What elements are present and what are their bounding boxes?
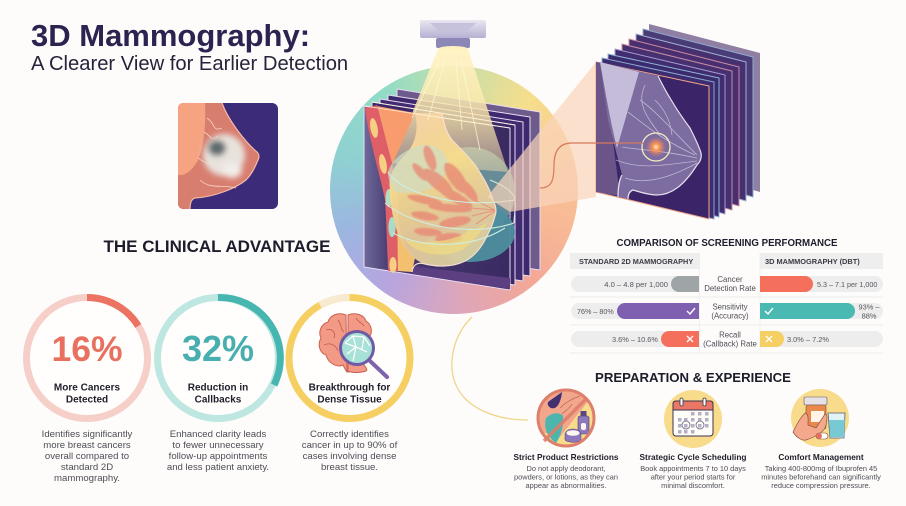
row: cancer detection rate: Cancer xyxy=(717,275,743,284)
row: sensitivity: Sensitivity xyxy=(712,302,748,312)
text: strategic cycle scheduling: minimal discomfort. xyxy=(661,481,725,490)
text: 16% description: mammography. xyxy=(54,473,120,484)
breast body xyxy=(390,113,496,266)
icon: small 2D mammogram with blurred mass xyxy=(178,103,278,209)
stat ring: 32% reduction in callbacks: 32% xyxy=(182,328,254,369)
icon: brain with magnifier xyxy=(319,314,387,377)
slice stack with tumour highlight xyxy=(596,24,760,219)
row: sensitivity: 93% – xyxy=(859,302,880,312)
text: strategic cycle scheduling: after your period starts for xyxy=(651,472,736,482)
text: 32% description: to fewer unnecessary xyxy=(172,440,264,451)
glandular lobes xyxy=(407,144,481,244)
text: strict product restrictions: appear as abnormalities. xyxy=(526,481,606,490)
x-ray fibres xyxy=(616,85,697,181)
fat stripe at base xyxy=(397,205,415,272)
text: dense tissue description: Correctly identifies xyxy=(310,429,389,440)
row: sensitivity: (Accuracy) xyxy=(711,312,749,320)
breast outline xyxy=(412,113,496,272)
pale dome xyxy=(388,145,448,193)
comparison table xyxy=(570,253,883,353)
text: comfort management xyxy=(761,452,881,490)
text: comfort management: Taking 400-800mg of Ibuprofen 45 xyxy=(765,464,877,473)
row: sensitivity: 88% xyxy=(862,312,877,320)
stat ring: breakthrough for dense tissue xyxy=(289,297,410,418)
text: 16% description: more breast cancers xyxy=(43,440,131,451)
x-ray beam xyxy=(392,49,508,172)
teal discs behind breast xyxy=(425,147,515,262)
text: 32% description: follow-up appointments xyxy=(169,451,268,462)
row: recall rate: 3.6% – 10.6% xyxy=(612,335,658,344)
table headers xyxy=(570,253,883,269)
tumour circle xyxy=(642,133,670,161)
heading: the clinical advantage: THE CLINICAL ADVANTAGE xyxy=(104,237,330,256)
stat ring: breakthrough for dense tissue: Dense Tissue xyxy=(317,394,382,406)
connector curve to preparation xyxy=(452,317,528,420)
row: sensitivity xyxy=(571,302,883,320)
nipple ducts xyxy=(470,200,495,224)
text: strict product restrictions xyxy=(513,452,619,490)
row: sensitivity: 76% – 80% xyxy=(577,307,614,316)
row: cancer detection rate xyxy=(571,275,883,293)
title xyxy=(31,18,348,75)
stat ring: 16% more cancers detected xyxy=(26,298,148,418)
icon: strict product restrictions xyxy=(538,390,594,446)
stat ring: 16% more cancers detected: 16% xyxy=(51,329,123,369)
projection cone to slice stack xyxy=(487,62,596,212)
text: 32% description: and less patient anxiety. xyxy=(167,462,269,473)
rib stripe xyxy=(365,105,398,271)
stat ring: breakthrough for dense tissue: Breakthrough for xyxy=(309,382,390,394)
row: recall rate: Recall xyxy=(719,330,741,340)
table headers: STANDARD 2D MAMMOGRAPHY xyxy=(579,257,693,266)
ribs xyxy=(369,118,397,273)
slice rings around breast xyxy=(385,172,515,244)
title: A Clearer View for Earlier Detection xyxy=(31,53,348,75)
text: strategic cycle scheduling: Book appointments 7 to 10 days xyxy=(640,464,746,473)
front slice left edge xyxy=(596,62,620,196)
tissue slices xyxy=(364,89,540,290)
row: cancer detection rate: 5.3 – 7.1 per 1,000 xyxy=(817,280,877,289)
stat ring: 32% reduction in callbacks: Reduction in xyxy=(188,382,248,394)
connector line to tumour xyxy=(540,143,643,188)
text: comfort management: reduce compression pressure. xyxy=(771,481,871,490)
x-ray breast xyxy=(600,62,701,199)
tumour glow xyxy=(646,137,666,157)
text: strategic cycle scheduling xyxy=(640,452,746,490)
text: 32% description: Enhanced clarity leads xyxy=(170,429,266,440)
chest wall xyxy=(377,106,415,165)
comparison heading: COMPARISON OF SCREENING PERFORMANCE xyxy=(616,238,838,249)
text: strict product restrictions: powders, or lotions, as they can xyxy=(514,472,618,482)
row: recall rate: (Callback) Rate xyxy=(703,340,757,348)
stat ring: 16% more cancers detected: Detected xyxy=(66,394,108,406)
row: recall rate: 3.0% – 7.2% xyxy=(787,335,829,344)
beam lines and slice top rims xyxy=(364,60,515,150)
icon: medication and water xyxy=(791,389,849,447)
heading: preparation and experience: PREPARATION & EXPERIENCE xyxy=(595,370,791,385)
text: dense tissue description: breast tissue. xyxy=(321,462,378,473)
text: comfort management: Comfort Management xyxy=(778,452,864,462)
row: cancer detection rate: Detection Rate xyxy=(704,284,756,293)
stat ring: 32% reduction in callbacks: Callbacks xyxy=(195,394,242,406)
table headers: 3D MAMMOGRAPHY (DBT) xyxy=(765,257,860,266)
lower plate shade xyxy=(412,266,510,289)
stat ring: 16% more cancers detected: More Cancers xyxy=(54,382,121,394)
text: dense tissue description: cases involving dense xyxy=(303,451,396,462)
text: comfort management: minutes beforehand can significantly xyxy=(761,472,881,482)
text: 16% description: overall compared to xyxy=(45,451,129,462)
text: 16% description: Identifies significantly xyxy=(42,429,133,440)
central 3D breast illustration xyxy=(364,20,540,290)
text: dense tissue description: cancer in up to 90% of xyxy=(302,440,398,451)
text: strategic cycle scheduling: Strategic Cycle Scheduling xyxy=(640,452,746,462)
text: strict product restrictions: Strict Product Restrictions xyxy=(513,452,619,462)
icon: calendar xyxy=(664,390,722,448)
stat ring: 32% reduction in callbacks xyxy=(158,297,280,418)
title: 3D Mammography: xyxy=(31,18,310,53)
lower yellow fat band xyxy=(405,222,488,255)
text: strict product restrictions: Do not apply deodorant, xyxy=(527,464,605,473)
gradient circle behind central illustration xyxy=(330,66,578,314)
row: cancer detection rate: 4.0 – 4.8 per 1,000 xyxy=(604,280,668,289)
row: recall rate xyxy=(571,330,883,348)
x-ray device xyxy=(420,20,486,52)
text: 16% description: standard 2D xyxy=(61,462,113,473)
